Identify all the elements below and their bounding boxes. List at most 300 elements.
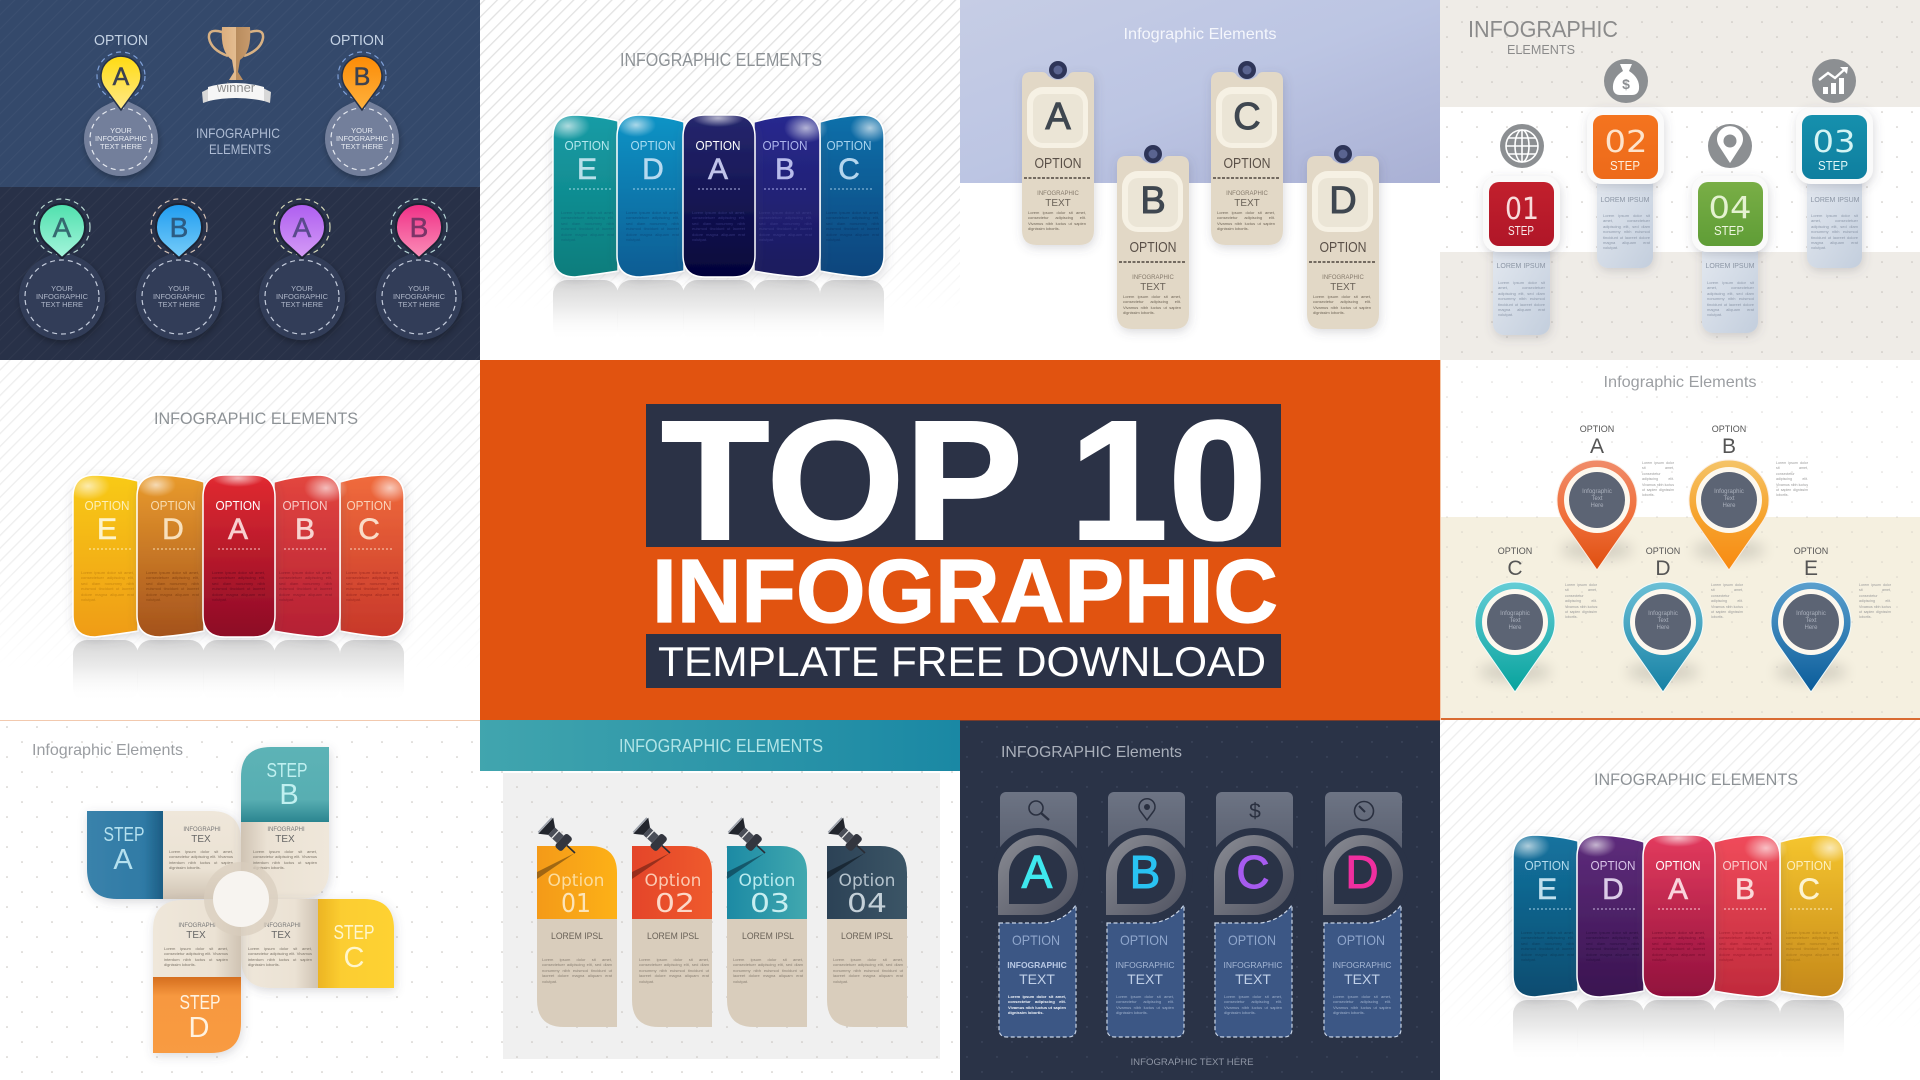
step B: B [279,779,299,811]
icon: push pin 3 [728,817,773,861]
tag C: Lorem ipsum dolor sit amet, consectetur adipiscing elit. Vivamus nibh luctus ut sapien dignissim lobortis. [1217,210,1275,231]
step D: INFOGRAPHI [178,923,216,929]
card 03: Lorem ipsum dolor sit amet, consectetuer adipiscing elit, sed diam nonummy nibh euismod tincidunt ut laoreet dolore magna aliquam erat volutpat. [733,957,803,984]
label panel: Lorem ipsum dolor sit amet, consectetur adipiscing elit. Vivamus nibh luctus ut sapien dignissim lobortis. [1008,994,1066,1015]
card D: D [1602,873,1624,906]
card C: Lorem ipsum dolor sit amet, consectetuer adipiscing elit, sed diam nonummy nibh euismod tincidunt ut laoreet dolore magna aliquam erat volutpat. [1786,930,1839,962]
step 04: STEP [1714,223,1744,238]
gloss highlights [66,469,410,503]
title line: template free download: TEMPLATE FREE DOWNLOAD [658,638,1266,685]
card B: B [1735,873,1755,906]
card E: OPTION [84,499,130,513]
icon: push pin 1 [538,817,583,861]
step B: TEX [275,834,295,845]
label panel: INFOGRAPHIC [1115,960,1175,970]
pin C: Infographic [1500,611,1530,617]
pin B: OPTION [1712,424,1746,434]
pin A: Lorem ipsum dolor sit amet, consectetur adipiscing elit. Vivamus nibh luctus ut sapien dignissim lobortis. [1642,461,1674,497]
step 02 [1587,108,1664,268]
step B [241,747,329,899]
card A: Lorem ipsum dolor sit amet, consectetuer adipiscing elit, sed diam nonummy nibh euismod tincidunt ut laoreet dolore magna aliquam erat volutpat. [212,570,265,602]
step B: STEP [266,760,308,782]
card A: OPTION [216,499,260,513]
pin E: Text [1805,618,1817,624]
panel: winner pins on navy [0,0,480,360]
icon: location [1708,124,1752,168]
step B: INFOGRAPHI [267,827,305,833]
card C: OPTION [826,139,872,153]
label panel: OPTION [1228,932,1276,948]
label panel [1324,905,1401,1037]
teal drop and pin A: A [53,212,72,243]
pin E: Infographic [1796,611,1826,617]
letter ring [1316,828,1410,922]
card 01: 01 [561,889,591,919]
step 02: STEP [1610,158,1640,173]
step A [87,811,241,899]
card D [137,475,204,637]
card D: OPTION [1590,859,1636,873]
card B [274,475,340,637]
card A: Lorem ipsum dolor sit amet, consectetuer adipiscing elit, sed diam nonummy nibh euismod tincidunt ut laoreet dolore magna aliquam erat volutpat. [1652,930,1705,962]
panel: central title [480,360,1440,720]
card C: OPTION [346,499,392,513]
icon: globe [1500,124,1544,168]
step 02: Lorem ipsum dolor sit amet, consectetuer adipiscing elit, sed diam nonummy nibh euismod tincidunt ut laoreet dolore magna aliquam erat volutpat. [1603,213,1650,250]
step 01 [1483,176,1560,335]
option A drop [84,98,158,176]
pin C: Text [1509,618,1521,624]
step C [241,899,394,988]
card C: Lorem ipsum dolor sit amet, consectetuer adipiscing elit, sed diam nonummy nibh euismod tincidunt ut laoreet dolore magna aliquam erat volutpat. [346,570,399,602]
pin E [1771,546,1891,692]
heading: Infographic Elements [1124,26,1276,43]
card 02 [632,846,712,1027]
panel background [0,360,480,720]
card B: OPTION [762,139,808,153]
panel: map pins [1440,360,1920,720]
purple drop and pin A: A [293,212,312,243]
card E: Lorem ipsum dolor sit amet, consectetuer adipiscing elit, sed diam nonummy nibh euismod tincidunt ut laoreet dolore magna aliquam erat volutpat. [1521,930,1574,962]
icon: trophy [209,27,263,80]
card E: E [1537,873,1557,906]
blue drop and pin B: TEXT HERE [158,300,200,309]
step 03: Lorem ipsum dolor sit amet, consectetuer adipiscing elit, sed diam nonummy nibh euismod tincidunt ut laoreet dolore magna aliquam erat volutpat. [1811,213,1858,250]
blue drop and pin B [136,199,222,340]
card 02: Lorem ipsum dolor sit amet, consectetuer adipiscing elit, sed diam nonummy nibh euismod tincidunt ut laoreet dolore magna aliquam erat volutpat. [639,957,709,984]
card D: D [162,513,184,546]
heading [1468,16,1618,57]
option A drop: YOUR [110,126,132,135]
card C: C [1798,873,1820,906]
step 03 [1796,108,1873,268]
tag A: TEXT [1045,198,1071,209]
step C: Lorem ipsum dolor sit amet, consectetur adipiscing elit. Vivamus interdum nibh luctus ut sapien dignissim lobortis. [248,946,312,967]
card 04 [827,846,907,1027]
heading: option right: OPTION [330,32,384,49]
letter ring [991,828,1085,922]
winner ribbon: winner [216,80,256,95]
tag D: OPTION [1320,240,1366,256]
card B: Lorem ipsum dolor sit amet, consectetuer adipiscing elit, sed diam nonummy nibh euismod tincidunt ut laoreet dolore magna aliquam erat volutpat. [1719,930,1772,962]
card E: OPTION [1524,859,1570,873]
card A: OPTION [1656,859,1700,873]
pin D: OPTION [1646,546,1680,556]
panel background [480,0,960,360]
panel background [480,720,960,1080]
step A: Lorem ipsum dolor sit amet, consectetur adipiscing elit. Vivamus interdum nibh luctus ut sapien dignissim lobortis. [169,849,233,870]
pin D: D [1655,557,1671,580]
step 01: STEP [1508,223,1534,238]
letter ring: C [1236,846,1270,898]
label panel: TEXT [1019,971,1055,987]
card B: B [775,153,795,186]
tag C: TEXT [1234,198,1260,209]
pin A: A [1590,435,1604,458]
card 01: LOREM IPSL [551,931,603,941]
step 04 [1692,176,1768,333]
label panel: TEXT [1344,971,1380,987]
teal drop and pin A: YOUR [51,284,73,293]
card E [73,475,138,637]
tag A: OPTION [1034,156,1082,172]
step D: D [189,1012,209,1044]
pin A: Here [1590,503,1604,509]
winner ribbon [202,80,271,103]
card 03 [727,846,807,1027]
pin D: Text [1657,618,1669,624]
heading: INFOGRAPHIC ELEMENTS [1594,770,1798,789]
step 03: LOREM IPSUM [1810,197,1860,204]
step D: TEX [186,930,206,941]
pin A [1557,424,1674,570]
panel: numbered steps with icons [1440,0,1920,360]
heading: INFOGRAPHIC Elements [1001,744,1182,761]
heading: INFOGRAPHIC ELEMENTS [620,50,822,70]
icon tab with location icon [1108,792,1185,852]
heading: Infographic Elements [1604,374,1756,391]
card A [991,792,1085,1037]
teal heading bar: INFOGRAPHIC ELEMENTS [619,736,823,756]
step A: A [113,844,133,876]
pink drop and pin B [376,199,462,340]
card 02: LOREM IPSL [647,931,699,941]
pin B: Text [1723,496,1735,502]
pink drop and pin B: B [410,212,428,243]
reflection [1513,1000,1844,1062]
tag C: INFOGRAPHIC [1226,191,1268,197]
panel: dark option cards [960,720,1440,1080]
pin C: OPTION [1498,546,1532,556]
icon tab with search icon [1000,792,1077,852]
heading: infographic elements [196,125,280,157]
card 02: Option [644,871,702,891]
card D: OPTION [150,499,196,513]
option B drop: INFOGRAPHIC [336,134,389,143]
label panel: INFOGRAPHIC [1007,960,1067,970]
card A: OPTION [696,139,740,153]
heading: Infographic Elements [32,742,183,759]
heading: option left: OPTION [94,32,148,49]
icon: push pin 4 [828,817,873,861]
label panel: OPTION [1012,932,1060,948]
step D: Lorem ipsum dolor sit amet, consectetur adipiscing elit. Vivamus interdum nibh luctus ut sapien dignissim lobortis. [164,946,228,967]
tag C [1211,61,1283,245]
step D [153,900,241,1053]
step 02: 02 [1604,125,1648,160]
tag A: INFOGRAPHIC [1037,191,1080,197]
step D: STEP [180,992,220,1014]
step 01: 01 [1505,192,1539,227]
orange background [480,360,1440,720]
pin C [1475,546,1597,692]
reflection [73,640,404,702]
card 03: 03 [750,889,790,919]
centre hub [204,862,278,936]
card 03: LOREM IPSL [742,931,794,941]
heading: INFOGRAPHIC [1468,16,1618,42]
option B pin: B [354,63,370,91]
card E: E [97,513,117,546]
step A: INFOGRAPHI [183,827,221,833]
pin A: Infographic [1582,489,1612,495]
pin B: Lorem ipsum dolor sit amet, consectetur adipiscing elit. Vivamus nibh luctus ut sapien dignissim lobortis. [1776,461,1808,497]
tag B: B [1140,180,1166,222]
pin D [1623,546,1743,692]
label panel: Lorem ipsum dolor sit amet, consectetur adipiscing elit. Vivamus nibh luctus ut sapien dignissim lobortis. [1224,994,1282,1015]
pin B: Infographic [1714,489,1744,495]
blue drop and pin B: B [170,212,188,243]
label panel [1107,905,1184,1037]
pin C: Here [1508,625,1522,631]
heading: ELEMENTS [1507,42,1575,57]
tag D [1307,145,1379,329]
pink drop and pin B: YOUR [408,284,430,293]
card 02: 02 [655,889,695,919]
card A: A [1668,873,1688,906]
letter ring: A [1022,846,1053,898]
multicolour cards set [1506,829,1850,1062]
teal drop and pin A: TEXT HERE [41,300,83,309]
purple drop and pin A: INFOGRAPHIC [276,292,329,301]
label panel: TEXT [1127,971,1163,987]
step A: TEX [191,834,211,845]
panel background [1440,0,1920,360]
panel background [960,0,1440,360]
card E: Lorem ipsum dolor sit amet, consectetuer adipiscing elit, sed diam nonummy nibh euismod tincidunt ut laoreet dolore magna aliquam erat volutpat. [81,570,134,602]
teal drop and pin A: INFOGRAPHIC [36,292,89,301]
heading: infographic elements: ELEMENTS [209,141,271,157]
card E: OPTION [564,139,610,153]
panel: warm option cards [0,360,480,720]
label panel: Lorem ipsum dolor sit amet, consectetur adipiscing elit. Vivamus nibh luctus ut sapien dignissim lobortis. [1116,994,1174,1015]
blue drop and pin B: INFOGRAPHIC [153,292,206,301]
panel background [1440,720,1920,1080]
step 04: LOREM IPSUM [1705,263,1755,270]
card E: E [577,153,597,186]
pin D: Here [1656,625,1670,631]
panel: multicolour option cards [1440,720,1920,1080]
card A: Lorem ipsum dolor sit amet, consectetuer adipiscing elit, sed diam nonummy nibh euismod tincidunt ut laoreet dolore magna aliquam erat volutpat. [692,210,745,242]
reflection [553,280,884,342]
label panel: OPTION [1120,932,1168,948]
tag D: INFOGRAPHIC [1322,275,1364,281]
card D: Lorem ipsum dolor sit amet, consectetuer adipiscing elit, sed diam nonummy nibh euismod tincidunt ut laoreet dolore magna aliquam erat volutpat. [146,570,199,602]
pin E: OPTION [1794,546,1828,556]
card D: D [642,153,664,186]
option B drop: YOUR [351,126,373,135]
card B: OPTION [282,499,328,513]
option A pin: A [113,63,130,91]
purple drop and pin A: YOUR [291,284,313,293]
label panel [999,905,1076,1037]
tag B: TEXT [1140,282,1166,293]
pin D: Lorem ipsum dolor sit amet, consectetur adipiscing elit. Vivamus nibh luctus ut sapien dignissim lobortis. [1711,583,1743,619]
gloss highlights [1506,829,1850,863]
icon tab with gauge icon [1325,792,1402,852]
tag A [1022,61,1094,245]
label panel: INFOGRAPHIC [1223,960,1283,970]
card B [754,115,820,277]
pin A: OPTION [1580,424,1614,434]
card 04: LOREM IPSL [841,931,893,941]
option A pin [97,52,145,110]
card A [683,115,755,277]
step 01: Lorem ipsum dolor sit amet, consectetuer adipiscing elit, sed diam nonummy nibh euismod tincidunt ut laoreet dolore magna aliquam erat volutpat. [1498,280,1545,317]
icon: money bag: $ [1622,76,1630,92]
card C [820,115,884,277]
letter ring [1099,828,1193,922]
pin E: E [1804,557,1818,580]
tag D: TEXT [1330,282,1356,293]
card C: Lorem ipsum dolor sit amet, consectetuer adipiscing elit, sed diam nonummy nibh euismod tincidunt ut laoreet dolore magna aliquam erat volutpat. [826,210,879,242]
tag B [1117,145,1189,329]
gloss highlights [546,109,890,143]
pin B: Here [1722,503,1736,509]
purple drop and pin A [259,199,345,340]
card A: A [708,153,728,186]
tag A: Lorem ipsum dolor sit amet, consectetur adipiscing elit. Vivamus nibh luctus ut sapien dignissim lobortis. [1028,210,1086,231]
heading: INFOGRAPHIC ELEMENTS [154,409,358,428]
icon: push pin 2 [633,817,678,861]
letter ring: D [1345,846,1379,898]
card E [553,115,618,277]
step C: STEP [334,922,374,944]
teal heading bar [480,720,960,771]
option A drop: TEXT HERE [100,142,142,151]
pin E: Here [1804,625,1818,631]
panel background [0,720,480,1080]
step C: TEX [271,930,291,941]
title line: top 10: TOP 10 [661,386,1267,576]
card 01: Option [548,871,604,891]
card B: B [295,513,315,546]
card C [340,475,404,637]
warm cards set [66,469,410,702]
card C: C [358,513,380,546]
letter ring: B [1130,846,1160,898]
card C: OPTION [1786,859,1832,873]
pin A: Text [1591,496,1603,502]
card 01 [537,846,617,1027]
pin D: Infographic [1648,611,1678,617]
card B [1099,792,1193,1037]
card 04: Option [838,871,896,891]
step C: INFOGRAPHI [263,923,301,929]
card A [1643,835,1715,997]
option B drop: TEXT HERE [341,142,383,151]
panel background [960,720,1440,1080]
card D: OPTION [630,139,676,153]
card D: Lorem ipsum dolor sit amet, consectetuer adipiscing elit, sed diam nonummy nibh euismod tincidunt ut laoreet dolore magna aliquam erat volutpat. [626,210,679,242]
step 02: LOREM IPSUM [1600,197,1650,204]
tag B: Lorem ipsum dolor sit amet, consectetur adipiscing elit. Vivamus nibh luctus ut sapien dignissim lobortis. [1123,294,1181,315]
panel background [0,0,480,360]
footer caption: INFOGRAPHIC TEXT HERE [1130,1057,1254,1068]
card B: Lorem ipsum dolor sit amet, consectetuer adipiscing elit, sed diam nonummy nibh euismod tincidunt ut laoreet dolore magna aliquam erat volutpat. [279,570,332,602]
card 04: Lorem ipsum dolor sit amet, consectetuer adipiscing elit, sed diam nonummy nibh euismod tincidunt ut laoreet dolore magna aliquam erat volutpat. [833,957,903,984]
card B: OPTION [1722,859,1768,873]
pin E: Lorem ipsum dolor sit amet, consectetur adipiscing elit. Vivamus nibh luctus ut sapien dignissim lobortis. [1859,583,1891,619]
option A drop: INFOGRAPHIC [95,134,148,143]
card A: A [228,513,248,546]
panel: blue glossy option cards [480,0,960,360]
card C: C [838,153,860,186]
title line: infographic: INFOGRAPHIC [652,542,1278,642]
card C [1780,835,1844,997]
label panel: TEXT [1235,971,1271,987]
card D [1577,835,1644,997]
letter ring [1207,828,1301,922]
label panel: OPTION [1337,932,1385,948]
panel background [1440,360,1920,720]
tag B: INFOGRAPHIC [1132,275,1174,281]
step 01: LOREM IPSUM [1496,263,1546,270]
card B: Lorem ipsum dolor sit amet, consectetuer adipiscing elit, sed diam nonummy nibh euismod tincidunt ut laoreet dolore magna aliquam erat volutpat. [759,210,812,242]
card E: Lorem ipsum dolor sit amet, consectetuer adipiscing elit, sed diam nonummy nibh euismod tincidunt ut laoreet dolore magna aliquam erat volutpat. [561,210,614,242]
icon: growth chart [1812,59,1856,103]
tag D: D [1329,180,1357,222]
tag B: OPTION [1130,240,1176,256]
card B [1714,835,1780,997]
step 04: Lorem ipsum dolor sit amet, consectetuer adipiscing elit, sed diam nonummy nibh euismod tincidunt ut laoreet dolore magna aliquam erat volutpat. [1707,280,1754,317]
pin B [1689,424,1808,570]
tag C: C [1233,96,1261,138]
step 04: 04 [1708,191,1752,226]
card 04: 04 [847,889,887,919]
pink drop and pin B: INFOGRAPHIC [393,292,446,301]
teal drop and pin A [19,199,105,340]
pin C: C [1507,557,1523,580]
card E [1513,835,1578,997]
option B drop [325,98,399,176]
step B: Lorem ipsum dolor sit amet, consectetur adipiscing elit. Vivamus interdum nibh luctus ut sapien dignissim lobortis. [253,849,317,870]
label panel: INFOGRAPHIC [1332,960,1392,970]
step 03: STEP [1818,158,1848,173]
card C [1207,792,1301,1037]
panel: beige hanging tags [960,0,1440,360]
card 03: Option [738,871,796,891]
panel: pinned option cards [480,720,960,1080]
step 03: 03 [1812,125,1856,160]
card D [1316,792,1410,1037]
label panel: Lorem ipsum dolor sit amet, consectetur adipiscing elit. Vivamus nibh luctus ut sapien dignissim lobortis. [1333,994,1391,1015]
icon tab with dollar icon [1216,792,1293,852]
card 01: Lorem ipsum dolor sit amet, consectetuer adipiscing elit, sed diam nonummy nibh euismod tincidunt ut laoreet dolore magna aliquam erat volutpat. [542,957,612,984]
step A: STEP [104,824,144,846]
tag C: OPTION [1224,156,1270,172]
heading: infographic elements: INFOGRAPHIC [196,125,280,141]
